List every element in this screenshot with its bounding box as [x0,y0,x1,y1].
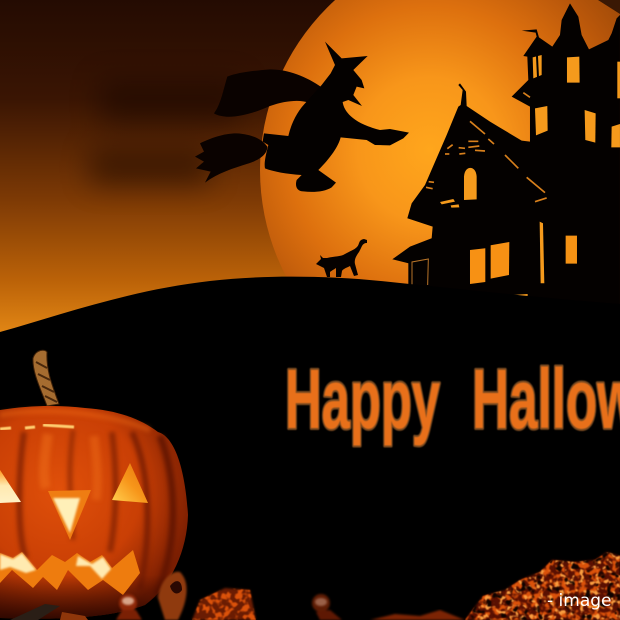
hill [0,277,620,620]
leaf pile bottom [370,610,465,620]
house windows [440,55,620,306]
leaves bottom of pumpkin 2 [60,612,88,620]
right eye [112,463,148,503]
haunted house [392,3,620,317]
pumpkin lid glow [0,425,74,429]
leaf pile right [465,552,620,620]
cat on hill [316,239,367,277]
mouth glow [0,553,111,579]
witch body and hat [263,42,409,192]
leaf pile centre [192,588,256,620]
house silhouette [392,3,620,317]
moon [260,0,620,400]
leaf texture centre [192,588,256,620]
leaf pile right holes [465,552,620,620]
leaves bottom of pumpkin [10,604,60,620]
porch door outline [412,259,428,285]
witch motion shadows [90,80,240,184]
autumn leaves [10,552,620,620]
leaf pile right texture [465,552,620,620]
pumpkin [0,350,188,619]
happy halloween title: Happy [285,352,440,446]
witch broom head [195,133,267,183]
nose [48,490,91,540]
image caption: - image [547,591,612,611]
small skull leaf 2 [312,594,342,620]
nose glow [53,498,80,533]
small skull leaf [116,594,142,620]
curled leaf hollow [170,581,182,593]
pumpkin bottom shade [0,575,172,619]
curled leaf [158,572,187,620]
leaf pile right highlights [465,552,620,620]
top right dark corner [598,0,620,14]
house window bars [534,56,541,77]
mouth [0,550,140,595]
witch cape [214,69,322,117]
witch on broom [195,42,409,192]
roof highlights [426,93,547,202]
pumpkin body [0,406,188,619]
left eye [0,470,21,503]
pumpkin ribs [0,411,173,595]
pumpkin stem [33,350,59,406]
stem twist marks [36,362,57,402]
